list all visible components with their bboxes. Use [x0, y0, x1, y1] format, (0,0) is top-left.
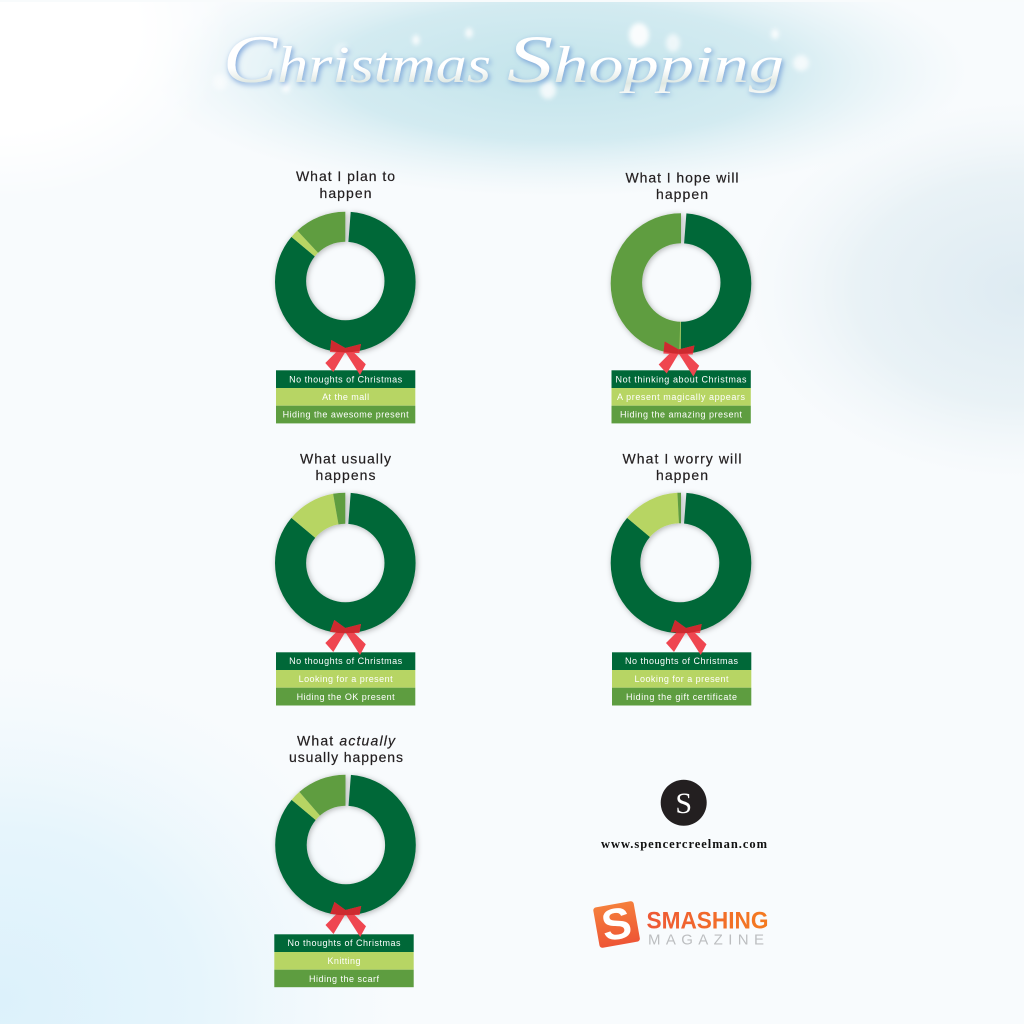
panel: what I hope will happen — [612, 170, 751, 423]
legend: Not thinking about Christmas — [616, 374, 747, 384]
icon: bow — [325, 340, 366, 375]
heading — [300, 450, 391, 483]
heading: happen — [320, 185, 372, 201]
legend: A present magically appears — [617, 392, 746, 402]
website url: www.spencercreelman.com — [601, 837, 768, 851]
legend: Hiding the OK present — [297, 692, 395, 702]
legend — [612, 370, 751, 423]
legend — [612, 652, 751, 706]
title — [223, 21, 784, 97]
legend: No thoughts of Christmas — [625, 656, 738, 666]
legend: Knitting — [328, 956, 360, 966]
icon: S badge: S — [598, 898, 635, 951]
legend: Hiding the awesome present — [283, 410, 409, 420]
heading: What usually — [300, 450, 391, 466]
icon: bow — [326, 902, 366, 937]
donut chart — [310, 810, 381, 880]
donut chart — [646, 248, 716, 319]
heading: What actually — [297, 732, 396, 748]
panel: what actually usually happens — [274, 732, 414, 987]
heading: What I plan to — [296, 168, 395, 184]
heading — [289, 732, 403, 765]
legend: Hiding the amazing present — [620, 410, 742, 420]
legend: Looking for a present — [299, 674, 393, 684]
legend — [274, 934, 414, 987]
snow dots — [213, 23, 809, 99]
heading: happens — [316, 467, 376, 483]
legend: Hiding the scarf — [309, 974, 379, 984]
panel: what usually happens — [276, 450, 415, 706]
legend: No thoughts of Christmas — [289, 374, 403, 384]
logo: Spencer Creelman: S — [675, 787, 692, 820]
donut chart — [310, 528, 380, 598]
legend: Looking for a present — [634, 674, 729, 684]
logo: Smashing Magazine — [592, 897, 768, 952]
icon: bow — [659, 342, 699, 376]
heading — [622, 450, 742, 483]
tagline: MAGAZINE — [648, 932, 764, 949]
logo: Spencer Creelman — [661, 780, 707, 826]
heading: What I worry will — [622, 450, 742, 466]
donut chart — [646, 528, 716, 598]
legend — [276, 370, 415, 423]
legend: Hiding the gift certificate — [626, 692, 737, 702]
wordmark: SMASHING — [646, 908, 768, 935]
icon: bow — [325, 620, 366, 655]
donut chart — [310, 247, 380, 317]
legend: At the mall — [322, 392, 369, 402]
legend: No thoughts of Christmas — [288, 938, 401, 948]
panel: what I plan to happen — [276, 168, 415, 423]
heading — [626, 170, 738, 202]
heading — [296, 168, 395, 201]
title: Shopping — [507, 21, 784, 97]
heading: happen — [656, 467, 708, 483]
icon: bow — [666, 620, 706, 655]
heading: usually happens — [289, 749, 403, 765]
legend — [276, 652, 415, 706]
title: Christmas — [223, 21, 491, 97]
heading: happen — [656, 186, 708, 202]
heading: What I hope will — [626, 170, 738, 186]
legend: No thoughts of Christmas — [289, 656, 403, 666]
panel: what I worry will happen — [612, 450, 751, 706]
